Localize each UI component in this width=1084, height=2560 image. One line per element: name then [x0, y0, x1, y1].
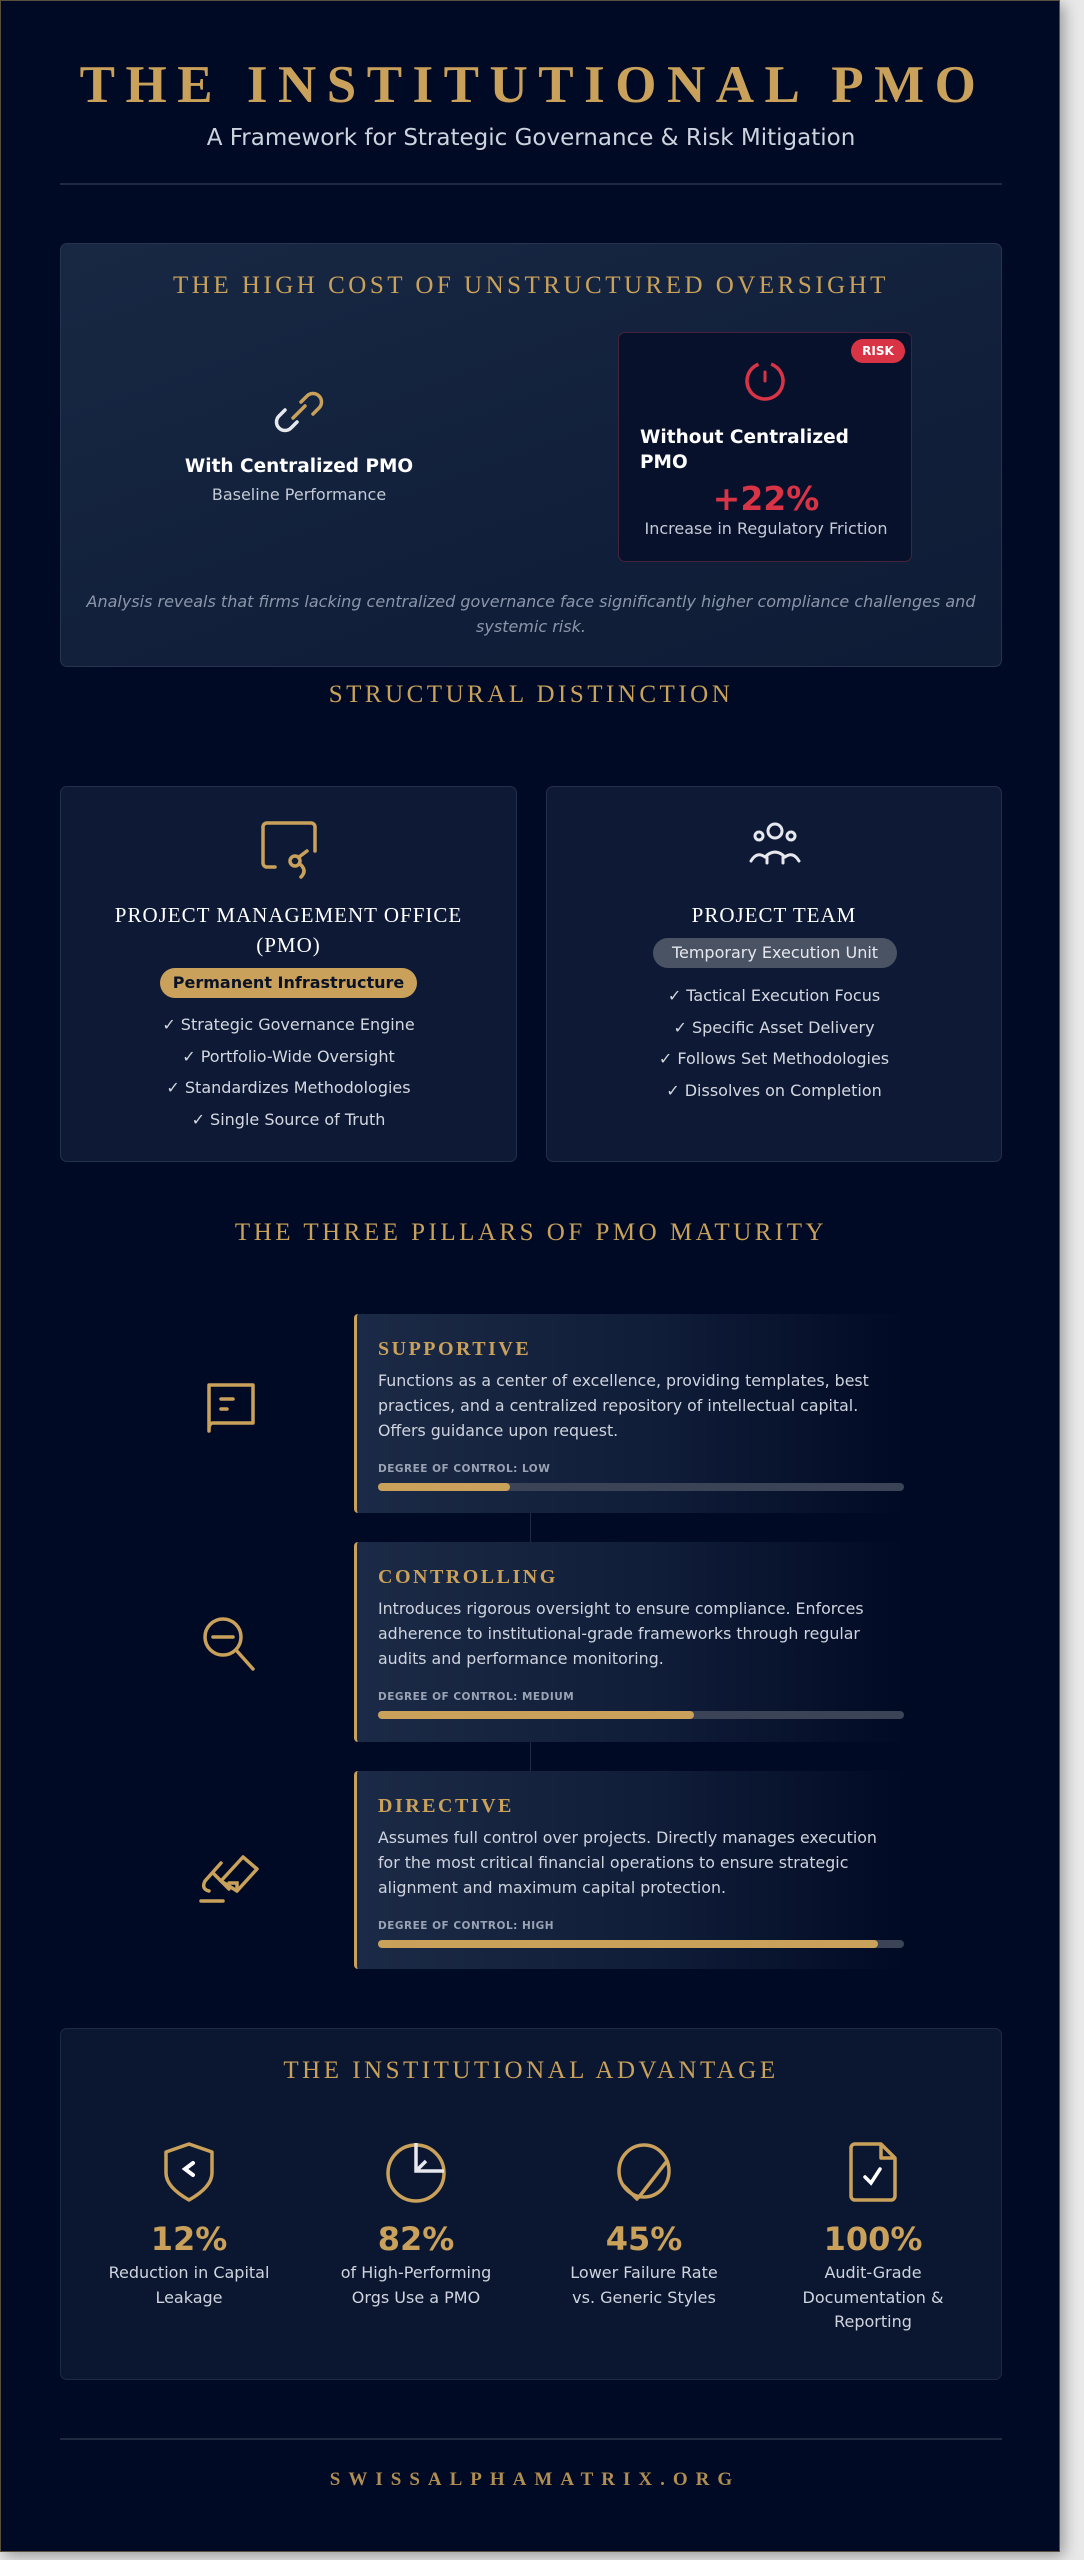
- pillar: supportive: SUPPORTIVE: [378, 1338, 531, 1360]
- title: THE INSTITUTIONAL PMO: [80, 56, 986, 114]
- footer: SWISSALPHAMATRIX.ORG: [330, 2469, 740, 2490]
- stat: 100%: Reporting: [834, 2312, 912, 2331]
- panel: PMO: PROJECT MANAGEMENT OFFICE: [115, 903, 462, 927]
- stat: 100%: 100%: [824, 2220, 922, 2258]
- pillar: controlling: [354, 1542, 907, 1742]
- panel: PMO: ✓ Standardizes Methodologies: [166, 1078, 411, 1097]
- badge: [160, 968, 417, 998]
- icon: pmo: [261, 821, 317, 879]
- stat: 45%: vs. Generic Styles: [572, 2288, 716, 2306]
- pillar: directive: DEGREE OF CONTROL: HIGH: [378, 1920, 554, 1932]
- badge: risk: [851, 339, 905, 363]
- callout: risk box: [618, 332, 912, 562]
- stat: 12%: [109, 2142, 269, 2306]
- icon: alert: [745, 362, 785, 401]
- panel: project team: [546, 786, 1002, 1162]
- stat: 82%: of High-Performing: [341, 2263, 491, 2282]
- pillar: controlling: Introduces rigorous oversight to ensure compliance. Enforces adherence to institutional-grade frameworks through regular audits and performance monitoring.: [378, 1599, 864, 1668]
- callout: risk box: Without Centralized PMO: [640, 427, 849, 473]
- badge: Permanent Infrastructure: [173, 973, 404, 992]
- pillar: supportive: DEGREE OF CONTROL: LOW: [378, 1463, 550, 1475]
- block: with PMO: With Centralized PMO: [185, 456, 413, 477]
- panel: institutional advantage: THE INSTITUTIONAL ADVANTAGE: [283, 2057, 779, 2084]
- pillar: controlling: CONTROLLING: [378, 1566, 558, 1588]
- panel: PMO: ✓ Single Source of Truth: [192, 1110, 385, 1128]
- stat: 45%: 45%: [606, 2220, 682, 2258]
- block: with PMO: [185, 392, 413, 504]
- badge: [653, 938, 897, 968]
- caption: Analysis reveals that firms lacking centralized governance face significantly higher compliance challenges and systemic risk.: [86, 592, 975, 636]
- stat: 45%: Lower Failure Rate: [570, 2263, 718, 2282]
- stat: 100%: [803, 2142, 943, 2331]
- pillar: directive: Assumes full control over projects. Directly manages execution for the most critical financial operations to ensure strategic alignment and maximum capital protection.: [378, 1828, 877, 1897]
- stat: 45%: [570, 2143, 718, 2306]
- heading: three pillars: THE THREE PILLARS OF PMO MATURITY: [235, 1219, 827, 1246]
- panel: PMO: [60, 786, 517, 1162]
- pillar: directive: DIRECTIVE: [378, 1795, 514, 1817]
- panel: project team: ✓ Dissolves on Completion: [666, 1080, 882, 1100]
- pillar: directive: [354, 1771, 907, 1969]
- panel: high cost: [60, 243, 1002, 667]
- stat: 82%: [341, 2143, 491, 2306]
- stat: 82%: Orgs Use a PMO: [352, 2288, 480, 2306]
- icon: supportive: [207, 1383, 255, 1433]
- panel: PMO: ✓ Portfolio-Wide Oversight: [182, 1046, 395, 1066]
- subtitle: A Framework for Strategic Governance & Risk Mitigation: [207, 125, 855, 151]
- heading: structural distinction: STRUCTURAL DISTINCTION: [329, 681, 733, 708]
- stat: 12%: Leakage: [155, 2288, 223, 2306]
- callout: risk box: +22%: [713, 479, 819, 518]
- panel: project team: ✓ Specific Asset Delivery: [673, 1018, 875, 1036]
- panel: project team: ✓ Follows Set Methodologies: [659, 1049, 889, 1068]
- badge: risk: RISK: [862, 344, 894, 358]
- pillar: supportive: Functions as a center of excellence, providing templates, best practices, and a centralized repository of intellectual capital. Offers guidance upon request.: [378, 1371, 869, 1440]
- heading: THE HIGH COST OF UNSTRUCTURED OVERSIGHT: [173, 272, 889, 299]
- icon: directive: [199, 1855, 259, 1903]
- icon: team: [749, 822, 801, 864]
- pillar: controlling: DEGREE OF CONTROL: MEDIUM: [378, 1691, 574, 1703]
- panel: project team: PROJECT TEAM: [692, 903, 856, 927]
- callout: risk box: Increase in Regulatory Friction: [645, 519, 887, 538]
- stat: 12%: 12%: [151, 2220, 227, 2258]
- panel: PMO: (PMO): [256, 933, 321, 957]
- badge: Temporary Execution Unit: [672, 943, 878, 962]
- stat: 82%: 82%: [378, 2220, 454, 2258]
- icon: controlling: [203, 1617, 255, 1671]
- icon: link: [274, 392, 324, 432]
- pillar: supportive: [354, 1314, 907, 1513]
- stat: 100%: Documentation &: [803, 2288, 943, 2306]
- panel: institutional advantage: [60, 2028, 1002, 2380]
- stat: 100%: Audit-Grade: [824, 2263, 922, 2282]
- block: with PMO: Baseline Performance: [212, 485, 386, 504]
- panel: PMO: ✓ Strategic Governance Engine: [162, 1015, 415, 1034]
- panel: project team: ✓ Tactical Execution Focus: [668, 986, 880, 1005]
- stat: 12%: Reduction in Capital: [109, 2263, 269, 2282]
